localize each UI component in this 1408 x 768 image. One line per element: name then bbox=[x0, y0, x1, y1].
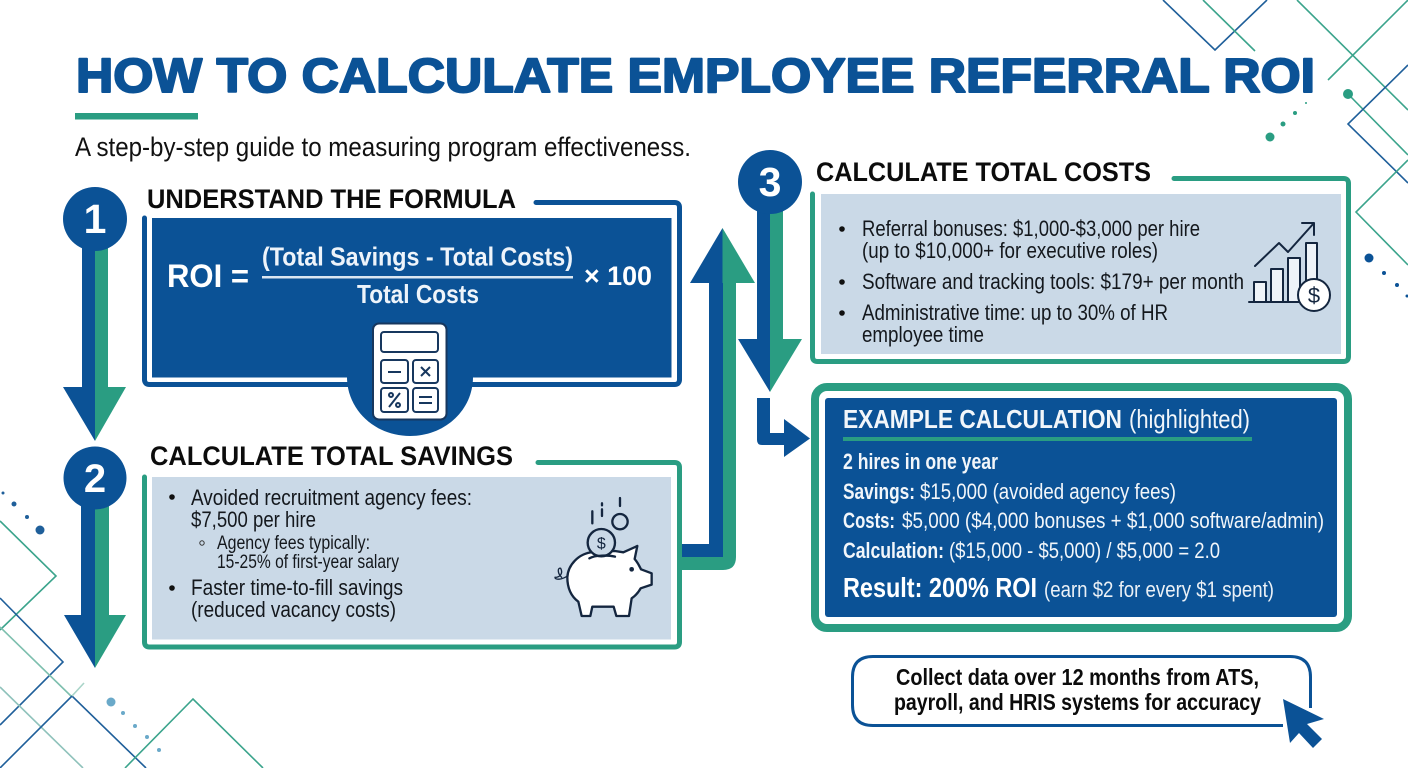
formula bbox=[167, 242, 652, 309]
example fill bbox=[825, 398, 1337, 617]
costs bullet list: Administrative time: up to 30% of HR bbox=[862, 300, 1168, 325]
icon: cursor bbox=[1283, 699, 1324, 748]
example lines: Calculation: bbox=[843, 538, 944, 563]
example lines: $5,000 ($4,000 bonuses + $1,000 software/admin) bbox=[902, 508, 1324, 533]
panel 2 heading: CALCULATE TOTAL SAVINGS bbox=[150, 441, 513, 471]
savings bullet list: Faster time-to-fill savings bbox=[191, 575, 403, 600]
subtitle: A step-by-step guide to measuring program effectiveness. bbox=[75, 132, 691, 162]
arrow: elbow into example calculation bbox=[757, 398, 810, 457]
example result: Result: 200% ROI bbox=[843, 572, 1037, 603]
costs bullet list: employee time bbox=[862, 322, 984, 347]
callout: data collection note bbox=[852, 656, 1324, 748]
formula: ROI = bbox=[167, 258, 249, 294]
panel: calculate total costs bbox=[812, 157, 1348, 362]
panel 2 frame bbox=[144, 462, 680, 647]
example result bbox=[843, 572, 1274, 603]
example heading: EXAMPLE CALCULATION bbox=[843, 404, 1122, 434]
example result: (earn $2 for every $1 spent) bbox=[1044, 577, 1274, 602]
step 1 number badge: 1 bbox=[84, 196, 106, 242]
example lines: Savings: bbox=[843, 479, 915, 504]
savings bullet list bbox=[169, 485, 472, 622]
arrow: step 3 downward bbox=[738, 205, 802, 392]
title underline bbox=[75, 113, 198, 120]
panel: calculate total savings bbox=[144, 441, 680, 647]
panel: understand the formula bbox=[144, 184, 680, 436]
formula: (Total Savings - Total Costs) bbox=[262, 242, 573, 272]
arrow: step 1 to step 2 bbox=[63, 240, 126, 441]
savings bullet list: 15-25% of first-year salary bbox=[217, 552, 399, 573]
costs bullet list: (up to $10,000+ for executive roles) bbox=[862, 238, 1158, 263]
example lines: $15,000 (avoided agency fees) bbox=[920, 479, 1176, 504]
step 2 number badge: 2 bbox=[84, 457, 106, 501]
title: HOW TO CALCULATE EMPLOYEE REFERRAL ROI bbox=[76, 49, 1315, 103]
example frame bbox=[815, 387, 1348, 628]
callout text bbox=[894, 664, 1261, 715]
panel 2 fill bbox=[152, 477, 671, 640]
panel 3 heading: CALCULATE TOTAL COSTS bbox=[816, 157, 1151, 187]
step 1 number badge bbox=[63, 187, 127, 251]
icon: piggy bank: $ bbox=[597, 535, 606, 552]
formula: Total Costs bbox=[357, 279, 479, 309]
arrow: step 2 up to step 3 bbox=[682, 228, 755, 570]
panel 1 heading: UNDERSTAND THE FORMULA bbox=[147, 184, 516, 214]
icon: piggy bank bbox=[555, 498, 652, 616]
example heading underline bbox=[843, 437, 1252, 441]
savings bullet list: (reduced vacancy costs) bbox=[191, 597, 396, 622]
step 3 number badge: 3 bbox=[759, 159, 781, 205]
example heading: (highlighted) bbox=[1129, 404, 1250, 434]
example lines: Costs: bbox=[843, 508, 895, 533]
icon: calculator bbox=[347, 324, 473, 436]
example lines: 2 hires in one year bbox=[843, 449, 998, 474]
example lines bbox=[843, 449, 1324, 563]
icon: growth chart with dollar coin: $ bbox=[1308, 283, 1320, 308]
panel 1 frame bbox=[144, 202, 680, 384]
step 2 number badge bbox=[64, 446, 126, 510]
panel 3 fill bbox=[821, 194, 1341, 354]
costs bullet list bbox=[839, 216, 1244, 347]
costs bullet list: Referral bonuses: $1,000-$3,000 per hire bbox=[862, 216, 1200, 241]
icon: growth chart with dollar coin bbox=[1249, 223, 1330, 311]
panel 3 frame bbox=[812, 178, 1348, 362]
savings bullet list: $7,500 per hire bbox=[191, 507, 316, 532]
costs bullet list: Software and tracking tools: $179+ per month bbox=[862, 269, 1244, 294]
savings bullet list: Avoided recruitment agency fees: bbox=[191, 485, 472, 510]
step 3 number badge bbox=[738, 150, 802, 214]
decoration: top right geometric lines and dots bbox=[1163, 0, 1408, 298]
callout outline bbox=[852, 656, 1310, 726]
panel 1 fill bbox=[152, 218, 672, 378]
savings bullet list: Agency fees typically: bbox=[217, 533, 370, 554]
panel: example calculation bbox=[815, 387, 1348, 628]
callout text: payroll, and HRIS systems for accuracy bbox=[894, 689, 1261, 715]
decoration: bottom left geometric lines and dots bbox=[0, 492, 263, 768]
formula: × 100 bbox=[584, 261, 652, 291]
example lines: ($15,000 - $5,000) / $5,000 = 2.0 bbox=[949, 538, 1220, 563]
callout text: Collect data over 12 months from ATS, bbox=[896, 664, 1259, 690]
arrow: step 2 downward bbox=[64, 500, 126, 668]
